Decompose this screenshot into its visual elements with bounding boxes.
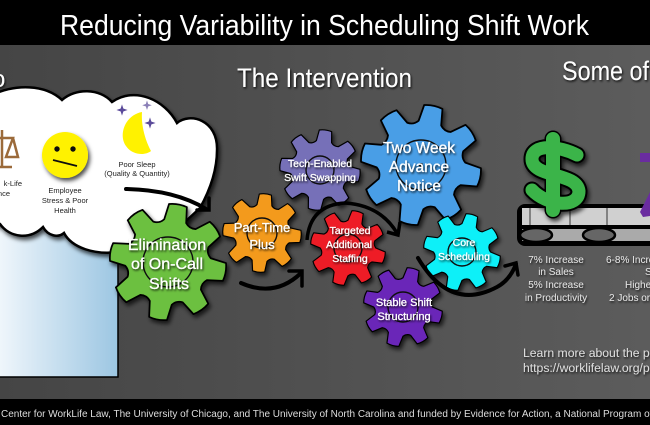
gear label: two week: Two Week bbox=[383, 140, 455, 157]
icon: scales bbox=[0, 130, 18, 167]
heading: the intervention: The Intervention bbox=[237, 63, 412, 93]
gear label: elimination: of On-Call bbox=[131, 256, 203, 273]
stats: second column: 2 Jobs or bbox=[609, 293, 650, 304]
icon: stars bbox=[118, 102, 154, 127]
stats: sales and productivity: in Productivity bbox=[525, 293, 587, 304]
label: employee stress: Health bbox=[54, 206, 76, 215]
gear: green bbox=[100, 194, 236, 330]
gear label: stable shift bbox=[376, 297, 432, 323]
stats: sales and productivity bbox=[525, 255, 587, 304]
label: poor sleep bbox=[104, 160, 170, 178]
gear: purple bbox=[354, 258, 452, 356]
gear label: stable shift: Stable Shift bbox=[376, 297, 432, 309]
arrow: cloud to gears bbox=[126, 189, 209, 210]
label: employee stress bbox=[42, 186, 89, 215]
gear label: elimination: Shifts bbox=[149, 276, 189, 293]
gear label: two week bbox=[383, 140, 455, 195]
gear label: targeted: Targeted bbox=[330, 225, 371, 237]
gear label: two week: Advance bbox=[389, 159, 449, 176]
gear label: core scheduling bbox=[438, 237, 490, 263]
stats: sales and productivity: 7% Increase bbox=[528, 255, 584, 266]
arrow: over red gear bbox=[307, 203, 400, 240]
stats: sales and productivity: in Sales bbox=[538, 267, 574, 278]
stats: second column bbox=[606, 255, 650, 304]
footer bar bbox=[0, 399, 650, 425]
gear: cyan bbox=[414, 204, 510, 300]
gear label: tech-enabled: Tech-Enabled bbox=[288, 158, 352, 170]
gear: periwinkle bbox=[274, 124, 366, 216]
panel: blue gradient box bbox=[0, 215, 118, 377]
gear label: stable shift: Structuring bbox=[377, 311, 431, 323]
arrow: around cyan gear bbox=[418, 258, 518, 295]
icon: crescent moon bbox=[123, 112, 151, 154]
gear label: targeted bbox=[326, 225, 372, 265]
gear label: elimination: Elimination bbox=[128, 237, 206, 254]
gear label: core scheduling: Core bbox=[453, 237, 476, 249]
stats: sales and productivity: 5% Increase bbox=[528, 280, 584, 291]
gear label: tech-enabled: Swift Swapping bbox=[284, 172, 356, 184]
gear label: part-time plus bbox=[234, 220, 290, 252]
gear label: elimination bbox=[128, 237, 206, 293]
gear: blue bbox=[349, 93, 493, 237]
gear label: targeted: Staffing bbox=[332, 253, 368, 265]
gear label: targeted: Additional bbox=[326, 239, 372, 251]
title bar bbox=[0, 0, 650, 45]
gear label: core scheduling: Scheduling bbox=[438, 251, 490, 263]
label: poor sleep: (Quality & Quantity) bbox=[104, 169, 170, 178]
gear label: part-time plus: Part-Time bbox=[234, 220, 290, 235]
gear label: part-time plus: Plus bbox=[249, 237, 275, 252]
text: learn more bbox=[523, 346, 650, 375]
icon: neutral face bbox=[42, 132, 88, 178]
footer text: Center for WorkLife Law, The University of Chicago, and The University of North Carolina and funded by Evidence for Action, a National Program of bbox=[1, 409, 650, 420]
gear label: tech-enabled bbox=[284, 158, 356, 184]
gear: orange bbox=[219, 190, 305, 276]
arrow: orange gear bbox=[241, 271, 302, 289]
title: Reducing Variability in Scheduling Shift Work bbox=[60, 10, 589, 42]
label: poor sleep: Poor Sleep bbox=[118, 160, 156, 169]
icon: dollar sign bbox=[532, 139, 579, 210]
conveyor belt bbox=[518, 205, 650, 245]
panel: thought cloud bbox=[0, 87, 217, 253]
label: employee stress: Stress & Poor bbox=[42, 196, 89, 205]
cloud shape bbox=[0, 87, 217, 253]
gear: red bbox=[302, 202, 394, 294]
label: employee stress: Employee bbox=[48, 186, 82, 195]
label: work-life: k-Life bbox=[4, 179, 22, 188]
icon: purple figure bbox=[640, 153, 650, 217]
gear label: two week: Notice bbox=[397, 178, 441, 195]
